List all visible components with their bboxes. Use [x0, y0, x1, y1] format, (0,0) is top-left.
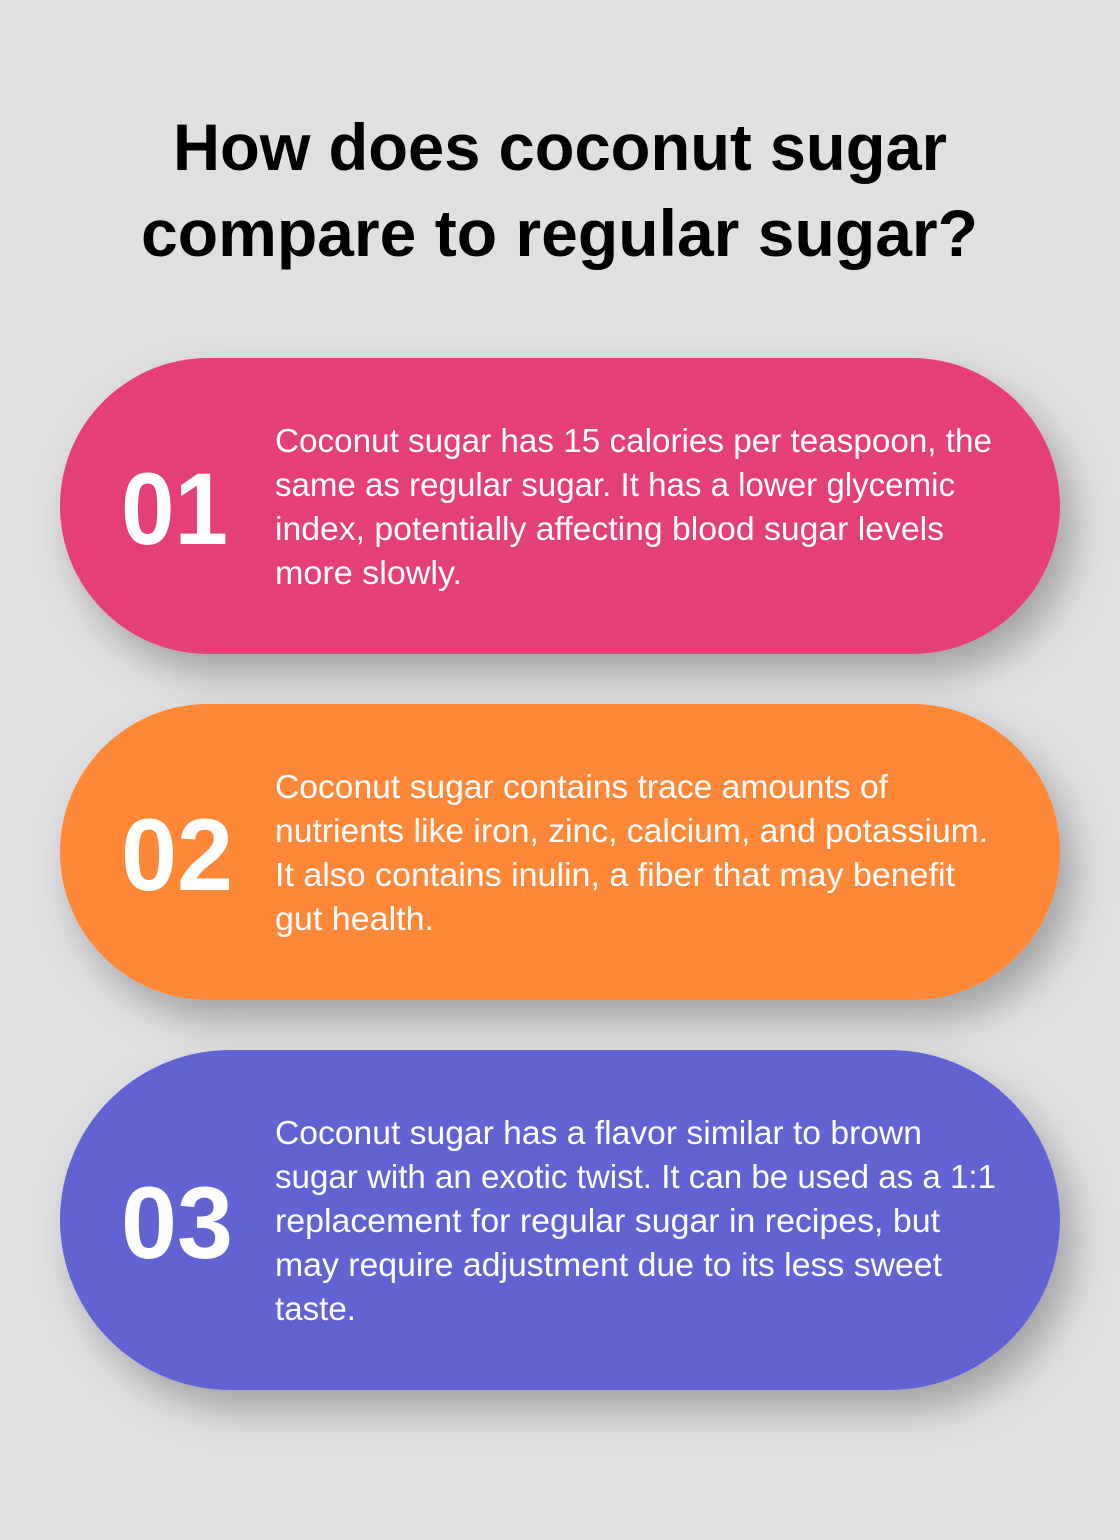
pill background: orange: [60, 704, 1060, 1000]
body text 02: nutrients like iron, zinc, calcium, and potassium.: [275, 812, 988, 849]
body text 01: same as regular sugar. It has a lower glycemic: [275, 466, 955, 503]
body text 01: index, potentially affecting blood sugar levels: [275, 510, 944, 547]
body text 01: more slowly.: [275, 554, 462, 591]
title: [141, 110, 978, 270]
title: How does coconut sugar: [173, 110, 947, 184]
title: compare to regular sugar?: [141, 196, 978, 270]
body text 02: Coconut sugar contains trace amounts of: [275, 768, 889, 805]
number 01: 01: [121, 452, 228, 566]
body text 03: sugar with an exotic twist. It can be used as a 1:1: [275, 1158, 996, 1195]
body text 03: may require adjustment due to its less sweet: [275, 1246, 942, 1283]
number 02: 02: [121, 798, 233, 912]
body text 03: [275, 1114, 996, 1327]
body text 02: gut health.: [275, 900, 434, 937]
panel: flavor and use in recipes: [60, 1050, 1060, 1390]
body text 03: taste.: [275, 1290, 356, 1327]
body text 03: replacement for regular sugar in recipes, but: [275, 1202, 940, 1239]
body text 03: Coconut sugar has a flavor similar to brown: [275, 1114, 922, 1151]
body text 02: [275, 768, 988, 937]
panel: calories and glycemic index: [60, 358, 1060, 654]
pill background: indigo: [60, 1050, 1060, 1390]
pill background: pink: [60, 358, 1060, 654]
panel: nutrients and inulin: [60, 704, 1060, 1000]
body text 01: Coconut sugar has 15 calories per teaspoon, the: [275, 422, 992, 459]
number 03: 03: [121, 1166, 233, 1280]
body text 01: [275, 422, 992, 591]
body text 02: It also contains inulin, a fiber that may benefit: [275, 856, 955, 893]
